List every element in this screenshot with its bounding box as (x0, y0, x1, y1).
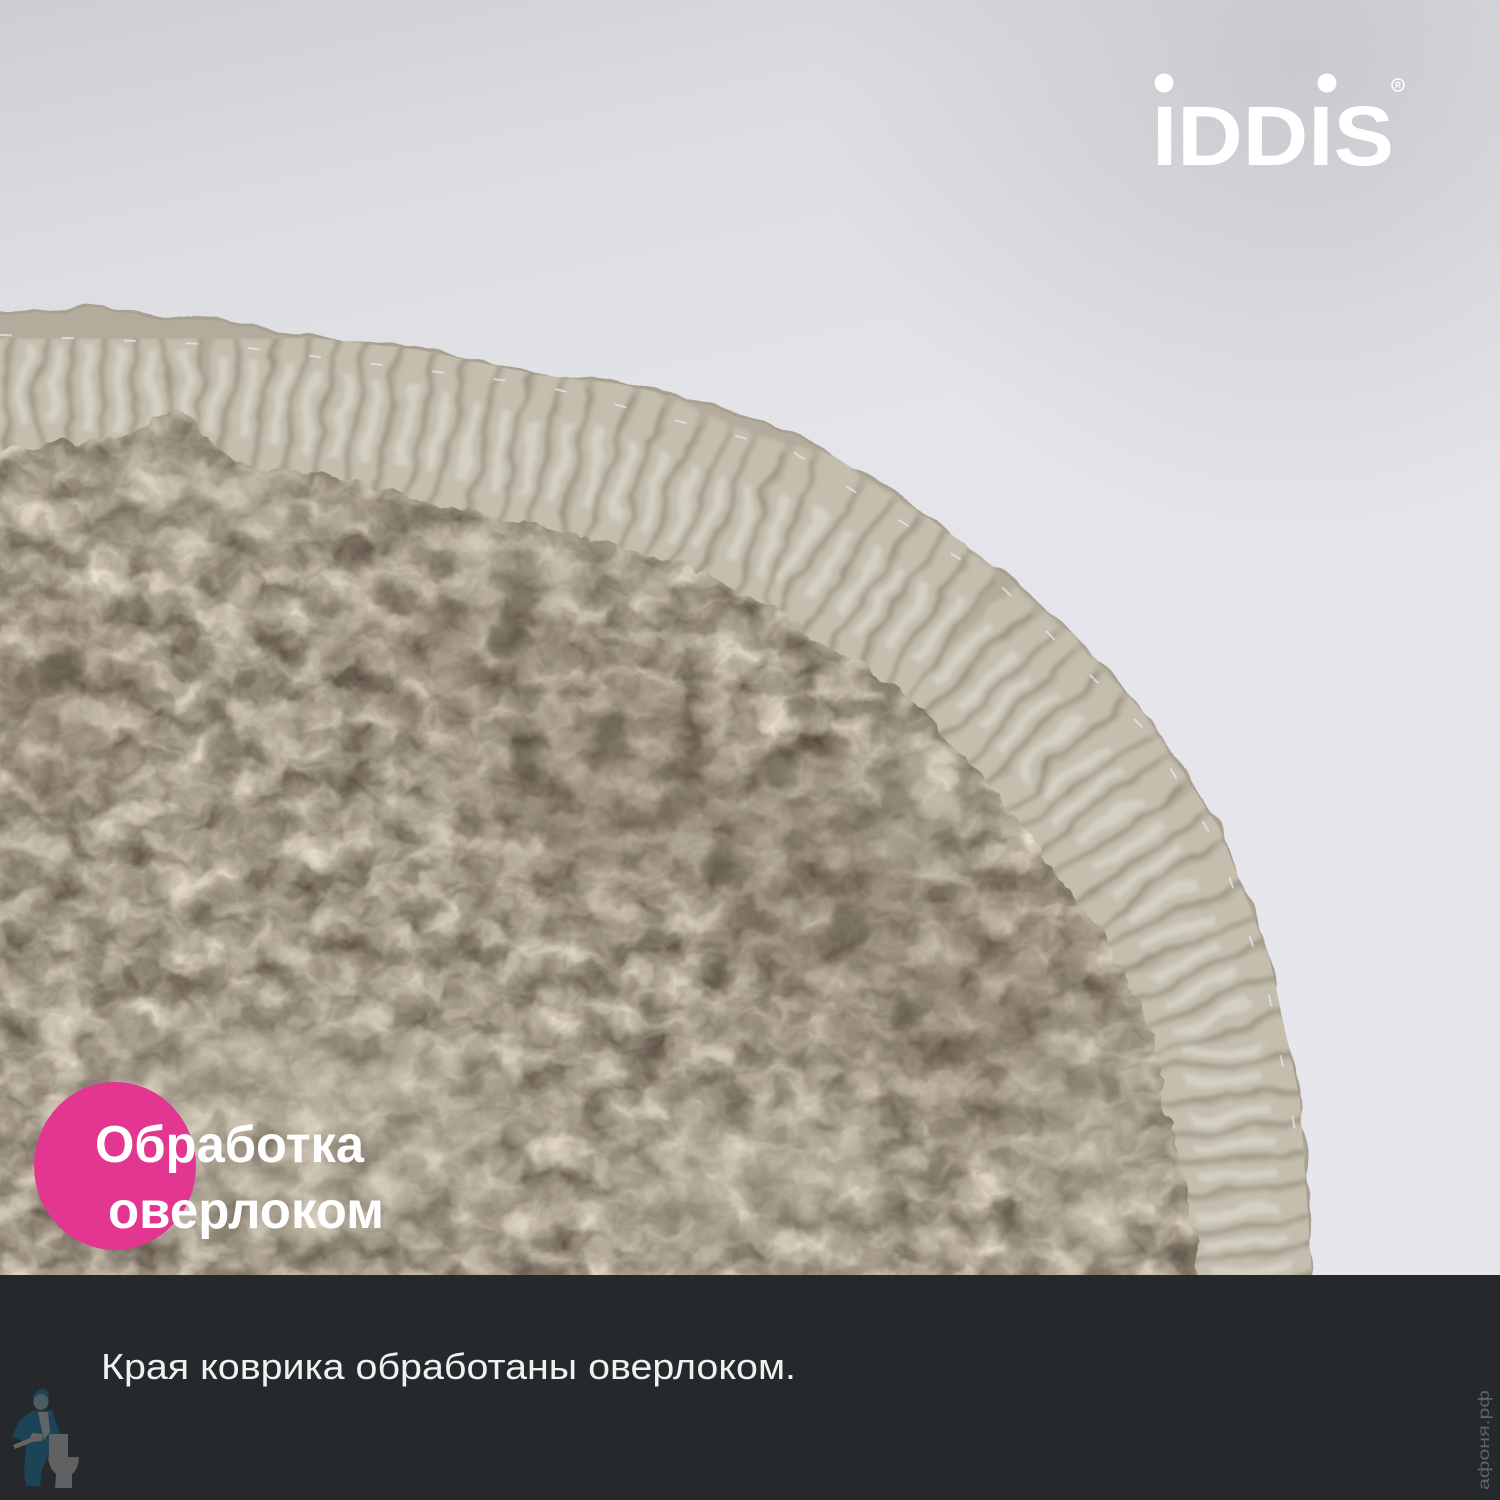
watermark: афоня.рф (1476, 1390, 1493, 1490)
mat shaggy pile (0, 400, 1220, 1320)
pink accent circle (34, 1082, 196, 1250)
wrench (13, 1433, 43, 1449)
white seam thread (0, 335, 1295, 1130)
mat overlock edge (0, 306, 1315, 1320)
photo: bath mat (0, 306, 1315, 1320)
logo: IDDIS: IDDIS (1152, 89, 1394, 183)
plumber shirt (38, 1412, 50, 1440)
heading: Обработка (95, 1116, 365, 1174)
footer band (0, 1275, 1500, 1500)
toilet (48, 1434, 79, 1488)
overlock stitches (0, 335, 1295, 1320)
icon: plumber mascot with toilet (12, 1389, 79, 1488)
pile shading (0, 445, 1160, 1280)
logo: IDDIS: R (1395, 81, 1401, 90)
heading: оверлоком (108, 1182, 384, 1240)
plumber figure (12, 1389, 60, 1486)
heading (95, 1116, 384, 1240)
footer description: Края коврика обработаны оверлоком. (101, 1346, 796, 1387)
plumber head (34, 1394, 48, 1410)
